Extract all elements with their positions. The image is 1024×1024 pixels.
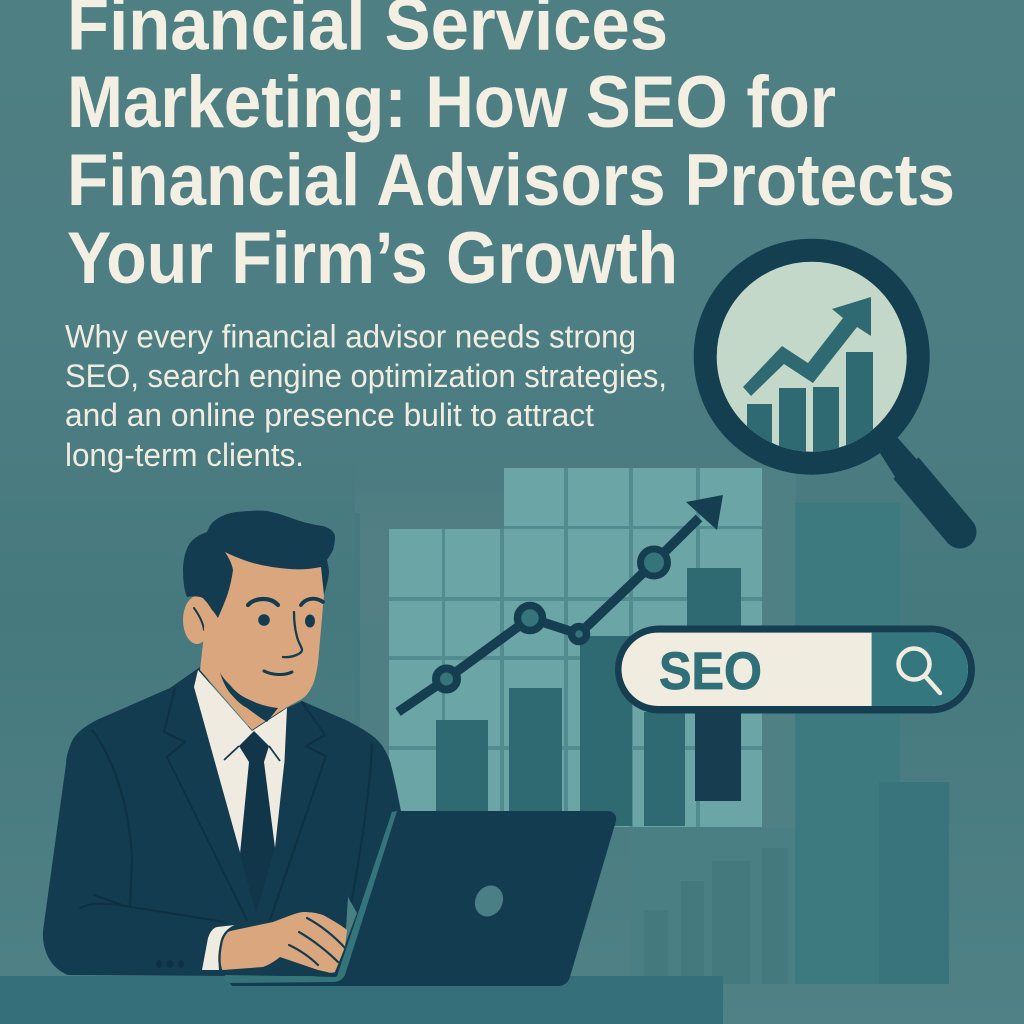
jacket buttons <box>156 960 184 968</box>
shirt cuff <box>202 925 235 970</box>
subtitle: Why every financial advisor needs strong <box>65 318 636 354</box>
title: Your Firm’s Growth <box>67 218 678 299</box>
face features <box>248 599 323 675</box>
ear <box>183 596 211 644</box>
bar chart <box>436 568 741 826</box>
title <box>67 0 955 299</box>
person: advisor <box>43 511 616 986</box>
suit jacket <box>43 667 401 976</box>
title: Marketing: How SEO for <box>67 62 836 143</box>
title: Financial Advisors Protects <box>67 140 955 221</box>
suit details <box>80 688 372 925</box>
icon: search magnifier <box>898 648 940 693</box>
SEO search bar <box>615 626 975 714</box>
subtitle <box>65 318 667 473</box>
shirt <box>194 670 287 854</box>
desk <box>0 976 723 1024</box>
neck and face <box>200 552 324 730</box>
laptop edge <box>225 811 397 983</box>
growth line with arrow <box>398 495 723 712</box>
subtitle: and an online presence bulit to attract <box>65 397 594 433</box>
subtitle: SEO, search engine optimization strategies, <box>65 358 667 394</box>
icon: magnifying glass with chart <box>705 250 976 548</box>
background bars <box>644 503 949 984</box>
hand <box>218 912 347 973</box>
finger lines <box>220 918 345 970</box>
tie <box>239 731 275 914</box>
building window grid <box>389 468 762 827</box>
chin shadow <box>220 672 278 722</box>
laptop <box>228 811 616 986</box>
hair <box>183 511 335 618</box>
SEO label: SEO <box>659 642 762 701</box>
subtitle: long-term clients. <box>65 437 304 473</box>
background skyline panel <box>355 460 800 984</box>
laptop logo <box>470 881 508 921</box>
